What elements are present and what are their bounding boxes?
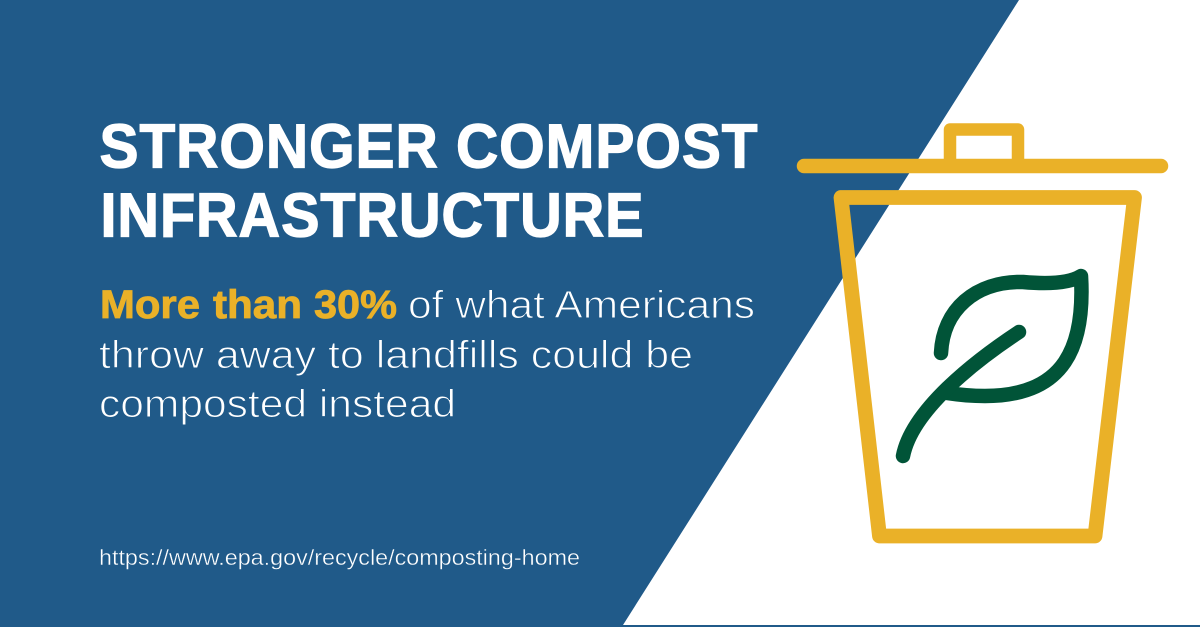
leaf	[903, 276, 1081, 456]
text block: compost statistic: of what Americans	[408, 284, 755, 327]
highlighted statistic: More	[100, 283, 200, 327]
text block: compost statistic	[99, 283, 755, 426]
bin lid	[804, 130, 1161, 166]
source url: https://www.epa.gov/recycle/composting-home	[99, 545, 580, 570]
title: STRONGER COMPOST	[100, 112, 758, 182]
highlighted statistic: than	[213, 283, 302, 327]
text block: compost statistic: throw away to landfills could be	[99, 334, 693, 377]
icon: compost bin with leaf	[804, 130, 1161, 536]
text block: compost statistic: composted instead	[99, 383, 456, 426]
title: INFRASTRUCTURE	[100, 182, 644, 250]
bin body	[841, 198, 1134, 536]
highlighted statistic: 30%	[314, 283, 397, 327]
title	[100, 112, 758, 250]
highlighted statistic	[100, 283, 397, 327]
